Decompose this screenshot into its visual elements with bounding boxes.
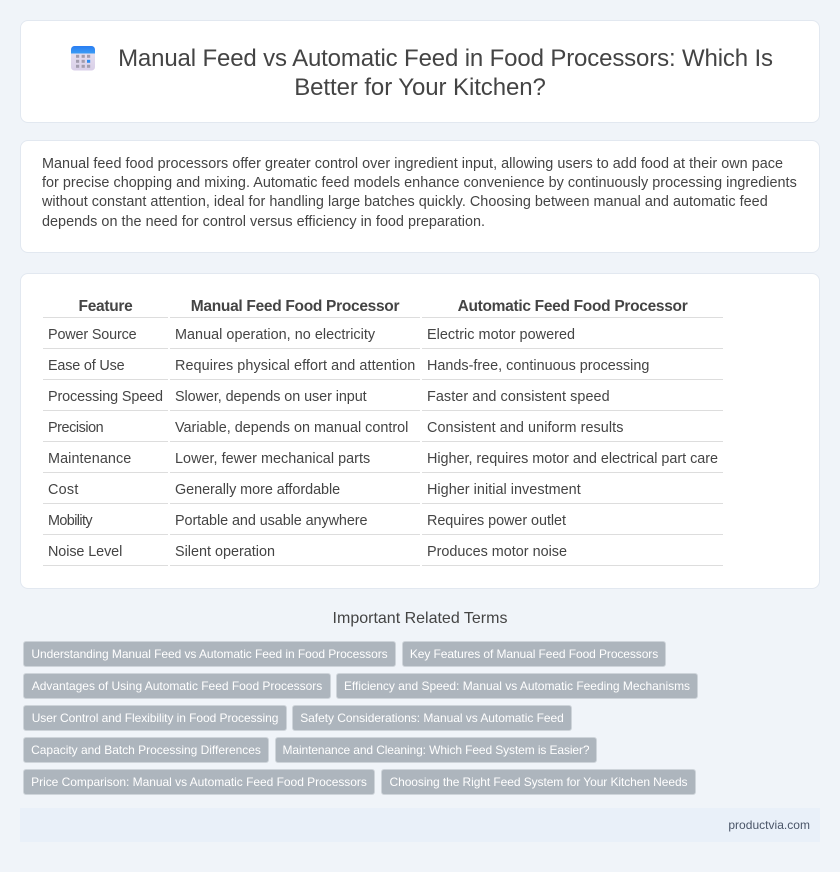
- row: noise level: Noise Level: [48, 544, 122, 560]
- heading: important related terms: Important Related Terms: [333, 610, 507, 627]
- table header: Automatic Feed Food Processor: [458, 298, 687, 315]
- row: ease of use: Requires physical effort and attention: [175, 358, 415, 374]
- row: mobility: Mobility: [48, 513, 92, 529]
- row: processing speed: Slower, depends on user input: [175, 389, 367, 405]
- tag: Understanding Manual Feed vs Automatic Feed in Food Processors: [31, 647, 388, 661]
- row: power source: Electric motor powered: [427, 327, 575, 343]
- row: precision: Consistent and uniform results: [427, 420, 623, 436]
- text block: introduction: [42, 156, 797, 230]
- row: ease of use: [48, 358, 649, 374]
- tag: [292, 705, 572, 731]
- tag: Price Comparison: Manual vs Automatic Feed Food Processors: [31, 775, 367, 789]
- row: cost: Generally more affordable: [175, 482, 340, 498]
- table header: [79, 298, 688, 315]
- tag: Advantages of Using Automatic Feed Food Processors: [32, 679, 322, 693]
- row: maintenance: Maintenance: [48, 451, 131, 467]
- title: Manual Feed vs Automatic Feed in Food Processors: Which Is: [118, 45, 773, 72]
- text block: introduction: depends on the need for control versus efficiency in food preparation.: [42, 214, 485, 230]
- row: ease of use: Ease of Use: [48, 358, 124, 374]
- tag: [381, 769, 696, 795]
- panel: comparison table: [20, 273, 820, 589]
- row: precision: Variable, depends on manual control: [175, 420, 408, 436]
- footer bar: [20, 808, 820, 842]
- tag: [23, 705, 287, 731]
- tag: [23, 737, 269, 763]
- tag: Key Features of Manual Feed Food Processors: [410, 647, 658, 661]
- text block: introduction: Manual feed food processors offer greater control over ingredient input, allowing users to add food at their own pace: [42, 156, 783, 172]
- row: cost: Cost: [48, 482, 79, 498]
- row: noise level: Produces motor noise: [427, 544, 567, 560]
- tag: [336, 673, 698, 699]
- tag: User Control and Flexibility in Food Processing: [32, 711, 278, 725]
- tag: Capacity and Batch Processing Differences: [31, 743, 261, 757]
- row: processing speed: Faster and consistent speed: [427, 389, 610, 405]
- row: cost: [48, 482, 581, 498]
- icon: calendar: [71, 46, 95, 70]
- panel: title card: [20, 20, 820, 123]
- row: processing speed: [48, 389, 610, 405]
- tag: Maintenance and Cleaning: Which Feed System is Easier?: [283, 743, 589, 757]
- tag: [23, 769, 375, 795]
- row: power source: Power Source: [48, 327, 136, 343]
- tag: [23, 641, 396, 667]
- row: mobility: Requires power outlet: [427, 513, 566, 529]
- row: cost: Higher initial investment: [427, 482, 581, 498]
- footer source: productvia.com: [728, 818, 810, 832]
- tag: Efficiency and Speed: Manual vs Automatic Feeding Mechanisms: [344, 679, 690, 693]
- row: ease of use: Hands-free, continuous processing: [427, 358, 649, 374]
- table header: Feature: [79, 298, 132, 315]
- title: Better for Your Kitchen?: [294, 74, 546, 101]
- title: [118, 45, 773, 101]
- tag: [23, 673, 331, 699]
- tag: [275, 737, 597, 763]
- row: mobility: [48, 513, 566, 529]
- panel: introduction: [20, 140, 820, 253]
- row: noise level: [48, 544, 567, 560]
- row: mobility: Portable and usable anywhere: [175, 513, 367, 529]
- tag: Choosing the Right Feed System for Your Kitchen Needs: [390, 775, 687, 789]
- row: power source: [48, 327, 575, 343]
- text block: introduction: without constant attention, ideal for handling large batches quickly. Choosing between manual and automatic feed: [42, 194, 768, 210]
- table: comparison: [43, 298, 723, 566]
- row: precision: Precision: [48, 420, 103, 436]
- row: precision: [48, 420, 623, 436]
- row: maintenance: [48, 451, 718, 467]
- row: processing speed: Processing Speed: [48, 389, 163, 405]
- tag: [402, 641, 666, 667]
- row: noise level: Silent operation: [175, 544, 275, 560]
- row: maintenance: Higher, requires motor and electrical part care: [427, 451, 718, 467]
- tag: Safety Considerations: Manual vs Automatic Feed: [300, 711, 564, 725]
- text block: introduction: for precise chopping and mixing. Automatic feed models enhance convenience by continuously processing ingredients: [42, 175, 797, 191]
- row: power source: Manual operation, no electricity: [175, 327, 375, 343]
- row: maintenance: Lower, fewer mechanical parts: [175, 451, 370, 467]
- table header: Manual Feed Food Processor: [191, 298, 399, 315]
